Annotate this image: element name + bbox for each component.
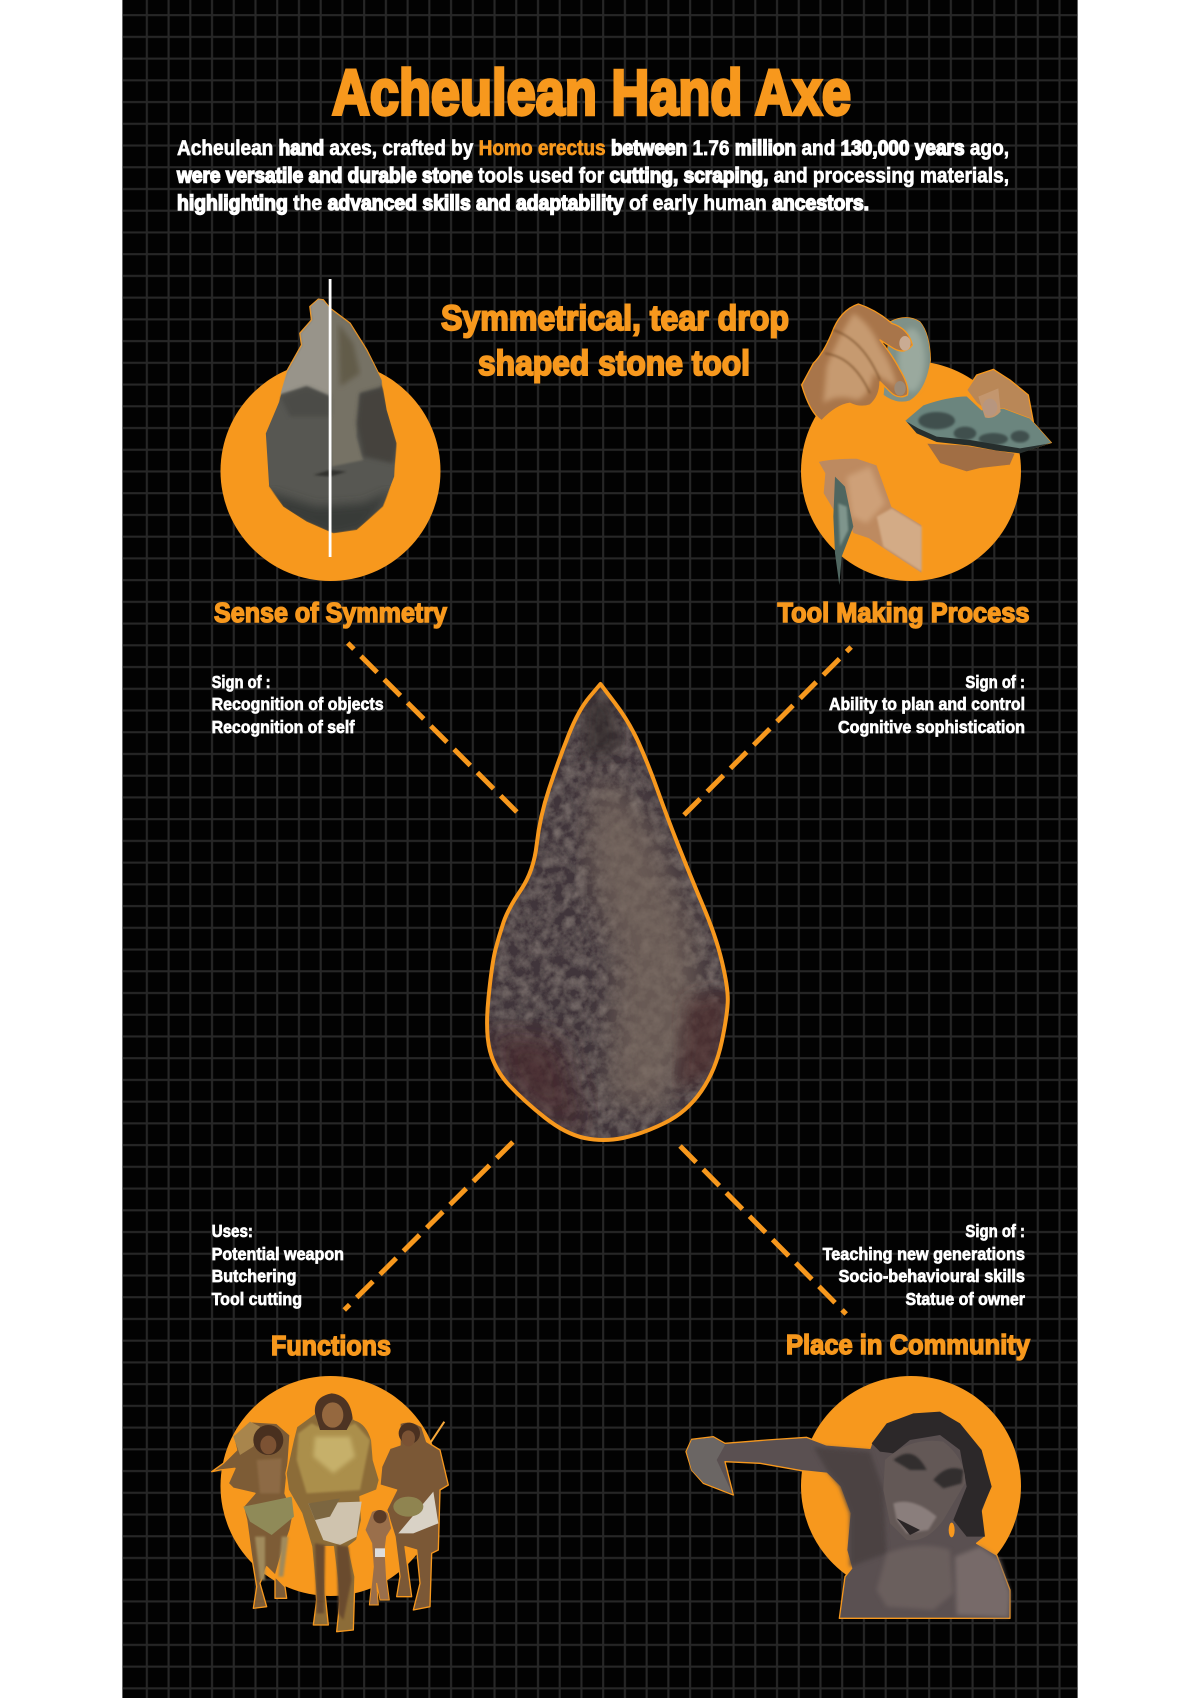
heading: tool making process: Tool Making Process <box>778 597 1030 628</box>
heading: functions: Functions <box>271 1330 391 1361</box>
text: community signs <box>823 1221 1025 1309</box>
icon: hominin holding hand axe <box>686 1412 1010 1618</box>
subtitle: symmetrical tear drop <box>441 299 789 383</box>
panel: community illustration <box>686 1376 1021 1618</box>
panel: tool making illustration <box>801 304 1052 585</box>
arrow: to symmetry <box>348 643 517 812</box>
panel: functions illustration <box>212 1376 448 1632</box>
heading: place in community: Place in Community <box>786 1329 1030 1360</box>
text: symmetry signs: Sign of : <box>212 672 271 692</box>
arrow: to tool making <box>684 647 851 815</box>
icon: symmetrical stone <box>263 297 398 537</box>
text: community signs: Socio-behavioural skills <box>838 1266 1025 1286</box>
text: symmetry signs <box>212 672 384 737</box>
icon: hands holding flake <box>905 369 1052 472</box>
central hand axe <box>483 684 732 1140</box>
panel: sense of symmetry illustration <box>220 279 440 581</box>
icon: left hominin <box>212 1422 294 1608</box>
text: tool making signs: Sign of : <box>965 672 1025 692</box>
icon: hand holding hammerstone <box>802 304 931 421</box>
subtitle: symmetrical tear drop: Symmetrical, tear drop <box>441 299 789 338</box>
text: tool making signs: Ability to plan and control <box>829 694 1025 714</box>
text: symmetry signs: Recognition of objects <box>212 694 384 714</box>
text: community signs: Teaching new generations <box>823 1244 1025 1264</box>
intro paragraph: highlighting the advanced skills and adaptability of early human ancestors. <box>177 191 869 215</box>
arrow: to functions <box>344 1142 513 1310</box>
text: symmetry signs: Recognition of self <box>212 717 355 737</box>
icon: child hominin <box>365 1510 392 1605</box>
intro paragraph: were versatile and durable stone tools used for cutting, scraping, and processing materials, <box>176 164 1009 188</box>
intro paragraph <box>176 136 1009 215</box>
text: community signs: Sign of : <box>965 1221 1025 1241</box>
text: functions uses: Uses: <box>212 1221 253 1241</box>
icon: symmetry axis line <box>329 279 332 557</box>
icon: hand knapping stone point <box>818 458 922 585</box>
text: functions uses: Butchering <box>212 1266 296 1286</box>
text: tool making signs: Cognitive sophistication <box>838 717 1025 737</box>
text: community signs: Statue of owner <box>906 1289 1025 1309</box>
icon: right hominin with spear <box>380 1422 448 1610</box>
text: functions uses: Potential weapon <box>212 1244 344 1264</box>
text: tool making signs <box>829 672 1025 737</box>
intro paragraph: Acheulean hand axes, crafted by Homo erectus between 1.76 million and 130,000 years ago, <box>177 136 1009 160</box>
text: functions uses: Tool cutting <box>212 1289 302 1309</box>
arrow: to community <box>680 1146 846 1314</box>
arrows: dashed connector lines <box>344 643 851 1314</box>
subtitle: symmetrical tear drop: shaped stone tool <box>478 344 750 383</box>
icon: orange circle left top <box>220 361 440 581</box>
icon: orange circle right bottom <box>801 1376 1021 1596</box>
heading: sense of symmetry: Sense of Symmetry <box>214 597 447 628</box>
text: functions uses <box>212 1221 344 1309</box>
panel: dark grid background <box>122 0 1078 1698</box>
icon: orange circle left bottom <box>220 1376 440 1596</box>
icon: orange circle right top <box>801 361 1021 581</box>
icon: central hominin <box>286 1393 379 1632</box>
title: Acheulean Hand Axe <box>332 56 851 128</box>
